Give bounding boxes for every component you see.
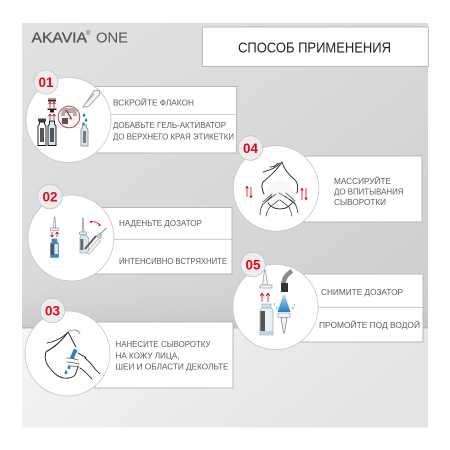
icon: applying serum to face	[45, 330, 100, 379]
step 04 text box	[290, 156, 422, 222]
step 01 text box	[95, 86, 236, 153]
step 05 circle	[233, 264, 318, 350]
panel: step 03	[25, 298, 233, 396]
title box	[202, 27, 428, 66]
step 01 text: add activator: ДОБАВЬТЕ ГЕЛЬ-АКТИВАТОР	[113, 120, 226, 130]
step 02 text: shake: ИНТЕНСИВНО ВСТРЯХНИТЕ	[119, 256, 227, 266]
step 01 badge: 01	[38, 75, 54, 90]
step 04 circle	[233, 146, 319, 231]
step 02 text: fit doser: НАДЕНЬТЕ ДОЗАТОР	[119, 218, 202, 228]
step 02 badge	[38, 184, 62, 209]
icon: doser removal and rinsing	[260, 270, 295, 335]
step 04 text: massage: ДО ВПИТЫВАНИЯ	[334, 186, 404, 196]
step 02 text box	[95, 208, 232, 274]
step 01 text: add activator	[113, 120, 234, 142]
step 03 text: apply serum: НАНЕСИТЕ СЫВОРОТКУ	[116, 339, 211, 349]
logo: ONE	[96, 29, 128, 46]
step 04 badge	[238, 136, 263, 160]
step 01 text: add activator: ДО ВЕРХНЕГО КРАЯ ЭТИКЕТКИ	[113, 132, 234, 142]
step 05 text: remove doser: СНИМИТЕ ДОЗАТОР	[321, 287, 403, 297]
step 02 circle	[28, 195, 114, 281]
step 04 text: massage: МАССИРУЙТЕ	[334, 175, 391, 186]
icon: doser and shaken vial	[50, 217, 106, 258]
step 03 text: apply serum	[116, 339, 229, 371]
step 03 badge: 03	[45, 304, 60, 318]
step 03 circle	[25, 311, 110, 396]
step 01 text: open vial: ВСКРОЙТЕ ФЛАКОН	[113, 97, 194, 108]
title box: СПОСОБ ПРИМЕНЕНИЯ	[238, 40, 391, 56]
panel: step 01	[26, 70, 236, 162]
step 01 circle	[26, 78, 111, 162]
icon: massaging face	[246, 162, 307, 216]
step 05 badge: 05	[245, 258, 261, 272]
step 03 text: apply serum: НА КОЖУ ЛИЦА,	[116, 350, 180, 360]
panel: step 04	[233, 136, 422, 231]
logo: ®	[86, 30, 91, 37]
step 03 text: apply serum: ШЕИ И ОБЛАСТИ ДЕКОЛЬТЕ	[116, 361, 229, 371]
step 01 badge	[34, 70, 58, 94]
panel: step 05	[233, 252, 423, 350]
step 05 text box	[290, 274, 423, 342]
logo	[32, 29, 128, 46]
icon: vials and dropper	[38, 90, 100, 146]
step 03 text box	[95, 322, 233, 388]
logo: AKAVIA	[32, 29, 87, 46]
step 05 badge	[241, 252, 265, 277]
step 04 text: massage: СЫВОРОТКИ	[334, 197, 386, 207]
panel: step 02	[28, 184, 232, 281]
step 04 badge: 04	[243, 141, 258, 156]
step 04 text: massage	[334, 175, 404, 207]
step 05 text: rinse: ПРОМОЙТЕ ПОД ВОДОЙ	[319, 319, 420, 330]
step 02 badge: 02	[42, 190, 58, 204]
step 03 badge	[40, 298, 65, 323]
